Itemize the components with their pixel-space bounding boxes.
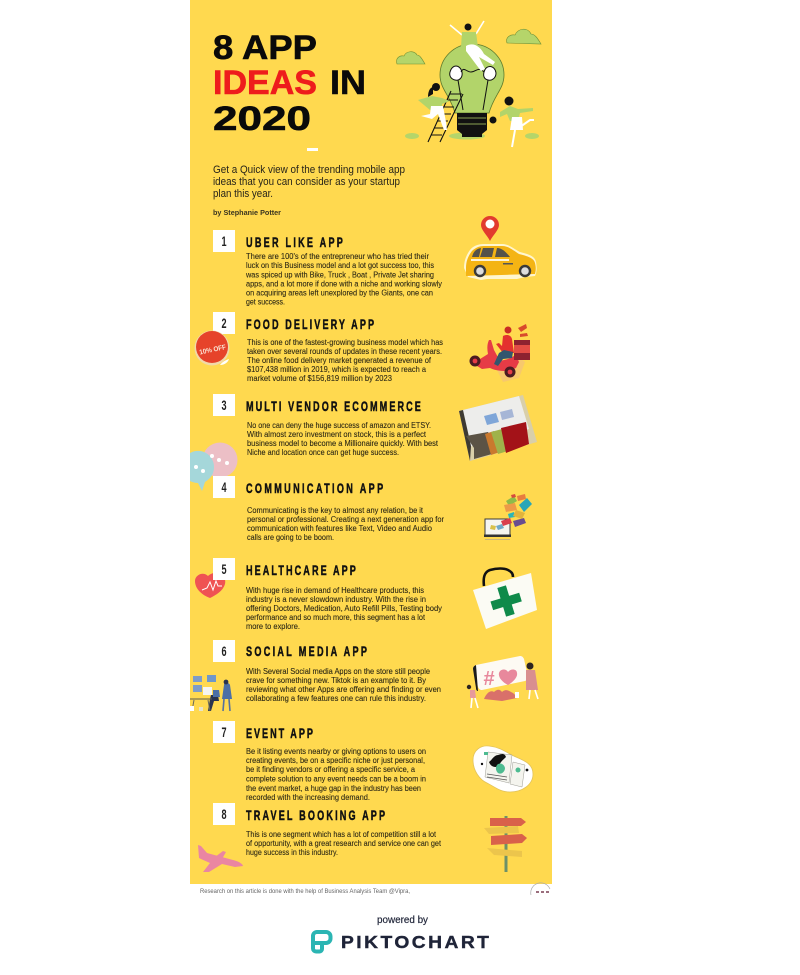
white dash accent: [307, 148, 318, 151]
section 2: Food delivery app: The online food delivery market generated a revenue of: [247, 355, 431, 365]
icon: 10% off sticker: [194, 330, 230, 366]
powered by label: powered by: [377, 914, 429, 926]
section 7: Event app: 7: [221, 724, 227, 741]
icon: laptop with flying messages: [484, 494, 532, 540]
section 4: Communication app: personal or professional. Creating a next generation app for: [247, 514, 444, 524]
section 5: Healthcare app: HEALTHCARE APP: [246, 562, 356, 579]
section 3: Multi vendor ecommerce: business model to become a Millionaire quickly. With best: [247, 438, 439, 448]
title: IN: [330, 64, 366, 102]
section 2: Food delivery app: FOOD DELIVERY APP: [246, 316, 374, 333]
byline: by Stephanie Potter: [213, 208, 281, 217]
section 4: Communication app: calls are going to be boom.: [247, 532, 334, 542]
Piktochart wordmark: PIKTOCHART: [341, 932, 490, 952]
intro text: plan this year.: [213, 188, 273, 200]
section 7: Event app: Be it listing events nearby or giving options to users on: [246, 746, 426, 756]
section 5: Healthcare app: more to explore.: [246, 621, 300, 631]
section 7: Event app: EVENT APP: [246, 725, 313, 742]
section 5: Healthcare app: industry is a never slowdown industry. With the rise in: [246, 594, 426, 604]
section 2: Food delivery app: taken over several rounds of updates in these recent years.: [247, 346, 442, 356]
section 5: Healthcare app: offering Doctors, Medication, Auto Refill Pills, Testing body: [246, 603, 443, 613]
section 2: Food delivery app: market volume of $156,819 million by 2023: [247, 373, 392, 383]
section 7: Event app: [213, 721, 426, 802]
section 8: Travel booking app: 8: [221, 806, 227, 823]
section 8: Travel booking app: huge success in this industry.: [246, 847, 338, 857]
section 3: Multi vendor ecommerce: Niche and location once can get huge success.: [247, 447, 399, 457]
section 7: Event app: complete solution to any event needs can be a boom in: [246, 774, 426, 784]
section 7: Event app: creating events, be on a specific niche or just personal,: [246, 755, 425, 765]
section 2: Food delivery app: $107,438 million in 2019, which is expected to reach a: [247, 364, 426, 374]
section 8: Travel booking app: This is one segment which has a lot of competition still a lot: [246, 829, 436, 839]
section 8: Travel booking app: [213, 803, 441, 857]
section 1: Uber like app: was spiced up with Bike, Truck , Boat , Private Jet sharing: [245, 269, 434, 279]
icon: office team at screens: [190, 675, 232, 711]
section 3: Multi vendor ecommerce: 3: [221, 397, 227, 414]
Piktochart logo mark: [313, 932, 330, 952]
section 6: Social media app: SOCIAL MEDIA APP: [246, 643, 367, 660]
section 2: Food delivery app: 2: [221, 315, 227, 332]
icon: delivery scooter: [470, 324, 530, 382]
intro text: ideas that you can consider as your startup: [213, 176, 400, 188]
icon: 10% off sticker: 10% OFF: [199, 344, 227, 357]
section 1: Uber like app: UBER LIKE APP: [246, 234, 343, 251]
image: ecommerce desk photo: [459, 395, 537, 461]
icon: location pin: [481, 216, 499, 241]
section 7: Event app: recorded with the increasing demand.: [246, 792, 370, 802]
icon: footer logo: [531, 883, 550, 895]
title: [213, 29, 366, 138]
section 2: Food delivery app: [213, 312, 444, 383]
section 3: Multi vendor ecommerce: With almost zero investment on stock, this is a perfect: [247, 429, 426, 439]
icon: social media hashtag and heart: #: [483, 668, 495, 690]
icon: chat bubbles: [190, 442, 238, 491]
icon: airplane: [198, 845, 243, 872]
section 6: Social media app: reviewing what other Apps are offering and finding or even: [246, 684, 441, 694]
icon: taxi: [464, 244, 537, 280]
section 1: Uber like app: There are 100's of the entrepreneur who has tried their: [246, 251, 429, 261]
section 1: Uber like app: apps, and a lot more if done with a niche and working slowly: [246, 278, 443, 288]
section 3: Multi vendor ecommerce: MULTI VENDOR ECOMMERCE: [246, 398, 421, 415]
section 7: Event app: the event market, a huge gap in the industry has been: [246, 783, 421, 793]
title: IDEAS: [213, 64, 317, 102]
icon: social media hashtag and heart: [467, 656, 538, 708]
icon: signpost: [484, 816, 527, 872]
section 6: Social media app: collaborating a few features one can rule this industry.: [246, 693, 426, 703]
section 8: Travel booking app: TRAVEL BOOKING APP: [246, 807, 385, 824]
section 3: Multi vendor ecommerce: [213, 394, 439, 457]
title: 8 APP: [213, 29, 317, 67]
section 5: Healthcare app: performance and so much more, this segment has a lot: [246, 612, 425, 622]
section 1: Uber like app: luck on this Business model and a lot got success too, this: [246, 260, 435, 270]
section 4: Communication app: communication with features like Text, Video and Audio: [247, 523, 432, 533]
intro text: [213, 164, 405, 200]
section 5: Healthcare app: 5: [221, 561, 227, 578]
section 2: Food delivery app: This is one of the fastest-growing business model which has: [247, 337, 444, 347]
section 1: Uber like app: 1: [221, 233, 227, 250]
icon: event cards: [473, 746, 533, 792]
section 1: Uber like app: on acquiring areas left unexplored by the Giants, one can: [246, 287, 433, 297]
section 1: Uber like app: get success.: [246, 296, 285, 306]
section 5: Healthcare app: [213, 558, 443, 631]
section 3: Multi vendor ecommerce: No one can deny the huge success of amazon and ETSY.: [247, 420, 431, 430]
section 4: Communication app: COMMUNICATION APP: [246, 480, 383, 497]
title: 2020: [213, 100, 311, 138]
section 6: Social media app: crave for something new. Tiktok is an example to it. By: [246, 675, 427, 685]
section 8: Travel booking app: of opportunity, with a great research and service one can get: [246, 838, 441, 848]
section 4: Communication app: 4: [221, 479, 227, 496]
panel: yellow background: [190, 0, 552, 884]
footer credit: Research on this article is done with the help of Business Analysis Team @Vipra,: [200, 889, 410, 895]
section 4: Communication app: [213, 476, 444, 542]
illustration: light bulb with people: [397, 21, 541, 147]
section 6: Social media app: [213, 640, 441, 703]
section 7: Event app: be it finding vendors or offering a specific service, a: [246, 764, 415, 774]
section 6: Social media app: With Several Social media Apps on the store still people: [246, 666, 430, 676]
icon: first aid kit: [473, 568, 537, 629]
intro text: Get a Quick view of the trending mobile app: [213, 164, 405, 176]
icon: heart with pulse: [195, 573, 225, 598]
section 6: Social media app: 6: [221, 643, 227, 660]
section 4: Communication app: Communicating is the key to almost any relation, be it: [247, 505, 423, 515]
section 1: Uber like app: [213, 230, 443, 306]
section 5: Healthcare app: With huge rise in demand of Healthcare products, this: [246, 585, 425, 595]
